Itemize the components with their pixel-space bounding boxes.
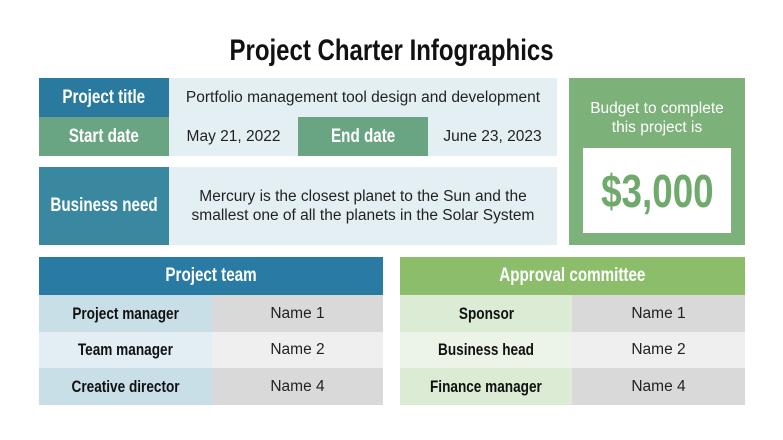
label: project title: Project title: [63, 86, 145, 108]
panel: project team: [39, 257, 383, 405]
label: start date: [39, 117, 169, 156]
row: project manager: [39, 295, 383, 332]
panel: approval committee: [400, 257, 745, 405]
row: project manager: Name 1: [270, 304, 325, 322]
row: creative director: Creative director: [71, 376, 180, 396]
value: project title: Portfolio management tool design and development: [186, 88, 540, 106]
text: budget label: this project is: [612, 119, 702, 136]
label: business need: Business need: [50, 195, 158, 216]
row: team manager: [39, 332, 383, 368]
row: business head: [400, 332, 745, 368]
header: project team: Project team: [165, 265, 257, 286]
header: approval committee: [400, 257, 745, 295]
panel: project info: [39, 78, 557, 156]
row: team manager: Team manager: [78, 340, 173, 359]
budget value box: [583, 148, 731, 233]
row: finance manager: [400, 368, 745, 405]
row: team manager: Name 2: [270, 341, 325, 358]
label: start date: Start date: [69, 126, 139, 146]
header: approval committee: Approval committee: [499, 265, 646, 286]
panel: budget: [569, 78, 745, 245]
text: business need: smallest one of all the planets in the Solar System: [192, 207, 534, 224]
text: budget label: Budget to complete: [590, 100, 724, 117]
value: start date: May 21, 2022: [187, 128, 280, 144]
label: end date: [298, 117, 428, 156]
panel: business need: [39, 167, 557, 245]
row: sponsor: Sponsor: [458, 304, 514, 322]
label: project title: [39, 78, 169, 117]
row: sponsor: [400, 295, 745, 332]
row: business head: Name 2: [631, 341, 686, 358]
row: project manager: Project manager: [72, 304, 179, 322]
header: project team: [39, 257, 383, 295]
text: business need: [192, 188, 534, 224]
budget value box: $3,000: [601, 164, 713, 216]
row: creative director: [39, 368, 383, 405]
row: sponsor: Name 1: [631, 304, 686, 322]
row: finance manager: Finance manager: [430, 376, 542, 396]
title: Project Charter Infographics: [229, 34, 554, 67]
label: end date: End date: [331, 126, 395, 146]
row: business head: Business head: [438, 340, 534, 359]
row: finance manager: Name 4: [631, 378, 686, 394]
label: business need: [39, 167, 169, 245]
row: creative director: Name 4: [270, 378, 325, 394]
text: business need: Mercury is the closest planet to the Sun and the: [199, 188, 527, 205]
value: end date: June 23, 2023: [443, 128, 542, 144]
text: budget label: [590, 100, 724, 136]
